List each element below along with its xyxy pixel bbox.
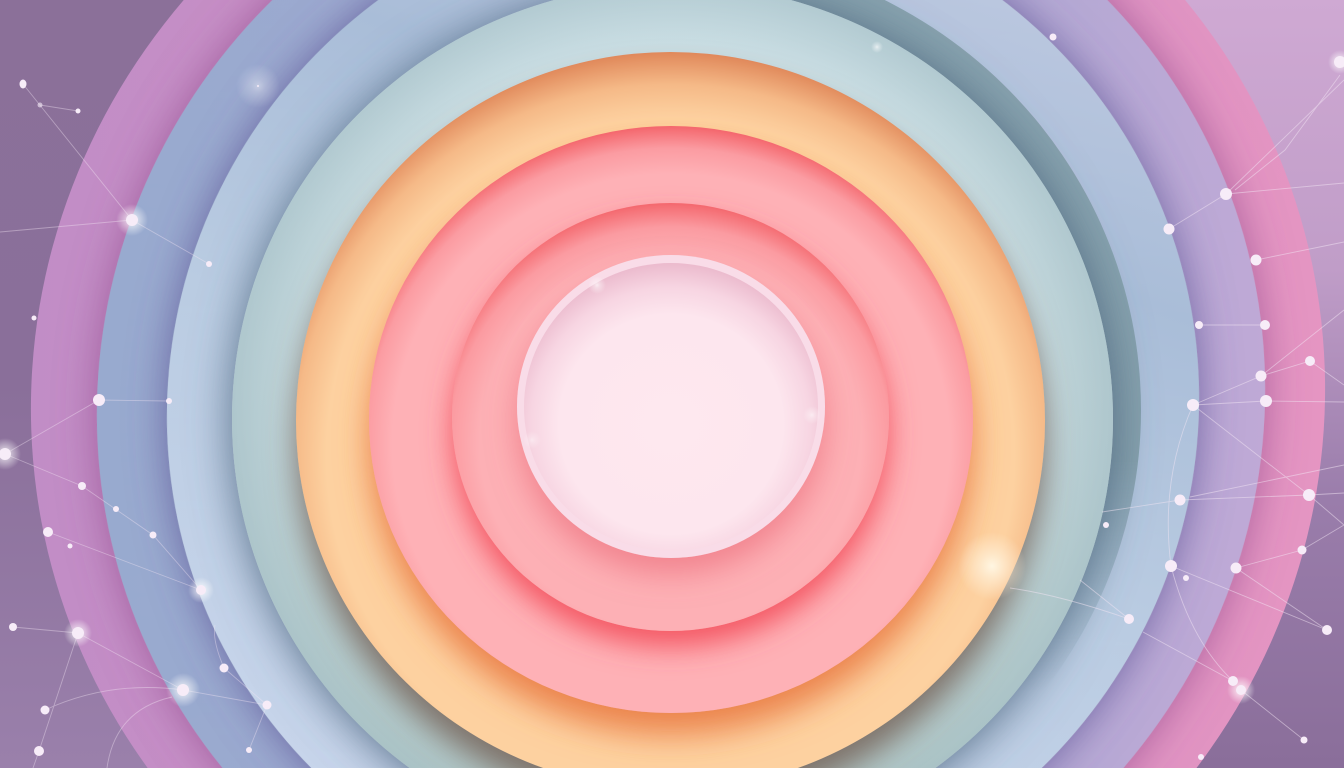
inner pink ring bbox=[452, 203, 889, 631]
orange ring bbox=[296, 52, 1045, 768]
sage green ring bbox=[232, 0, 1113, 768]
glowing nodes left bbox=[0, 80, 272, 756]
network lines left bbox=[0, 84, 267, 768]
glowing nodes right bbox=[1050, 34, 1344, 760]
dark teal crescent bbox=[792, 0, 1141, 656]
central glass disc bbox=[517, 255, 825, 558]
network lines right bbox=[1010, 75, 1344, 740]
coral pink ring bbox=[369, 126, 973, 713]
light blue ring bbox=[158, 0, 1208, 768]
